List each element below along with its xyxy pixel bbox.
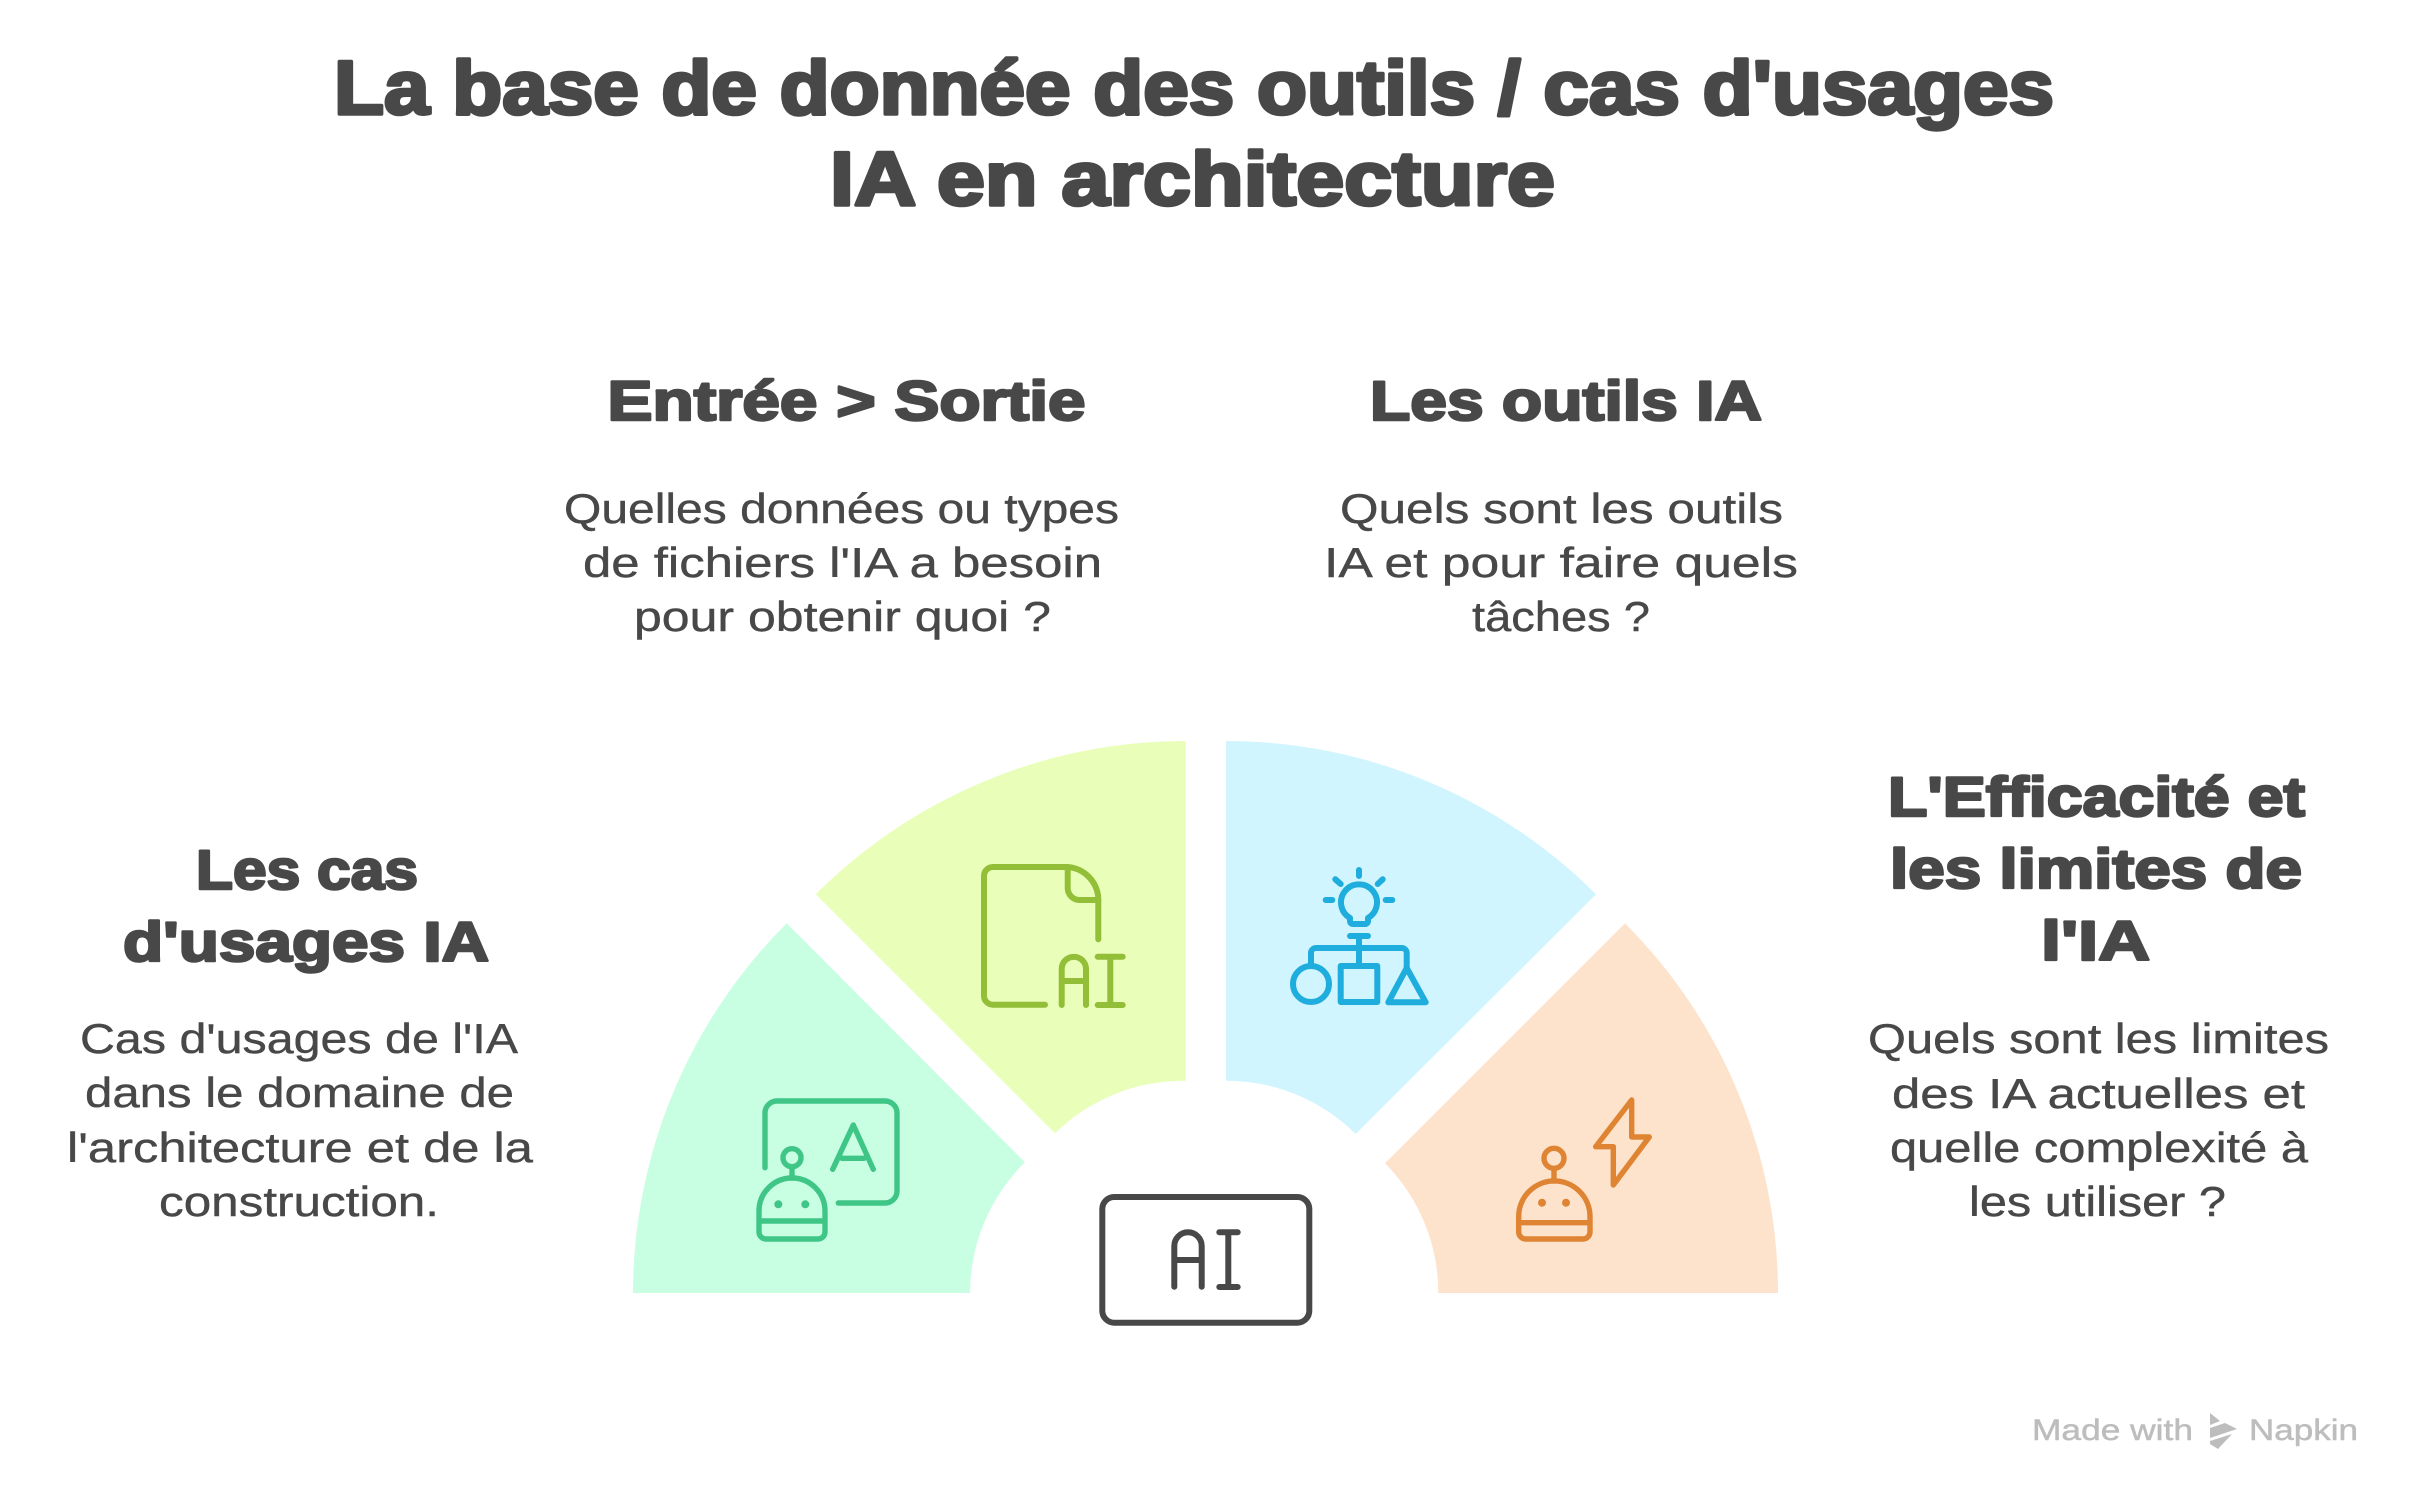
icon: robot with letter board: [759, 1101, 897, 1239]
heading: les cas d'usages IA: [123, 838, 489, 973]
text block: entrée sortie description: [564, 485, 1119, 640]
text block: efficacité description: des IA actuelles et: [1892, 1070, 2305, 1117]
text block: cas d'usages description: l'architecture et de la: [67, 1124, 534, 1171]
heading: efficacité et limites: L'Efficacité et: [1888, 765, 2305, 828]
text block: entrée sortie description: pour obtenir quoi ?: [634, 593, 1051, 640]
heading: entrée sortie: Entrée > Sortie: [608, 369, 1086, 432]
icon: robot with lightning bolt: [1519, 1100, 1649, 1239]
heading: les outils IA: Les outils IA: [1370, 369, 1762, 432]
title: IA en architecture: [830, 137, 1555, 222]
text block: entrée sortie description: de fichiers l'IA a besoin: [583, 539, 1102, 586]
watermark: made with napkin: Made with: [2032, 1414, 2193, 1447]
text block: les outils description: tâches ?: [1472, 593, 1650, 640]
text block: efficacité description: quelle complexité à: [1890, 1124, 2309, 1171]
title: [334, 46, 2054, 222]
watermark: made with napkin: [2032, 1413, 2358, 1449]
icon: AI document: [984, 867, 1123, 1005]
watermark: made with napkin: Napkin: [2249, 1414, 2358, 1447]
text block: les outils description: [1324, 485, 1798, 640]
heading: les cas d'usages IA: d'usages IA: [123, 910, 489, 973]
text block: cas d'usages description: dans le domaine de: [85, 1069, 514, 1116]
text block: les outils description: IA et pour faire quels: [1324, 539, 1798, 586]
center box: AI: [1102, 1197, 1309, 1323]
text block: efficacité description: Quels sont les limites: [1868, 1015, 2329, 1062]
panel: efficacité et limites text: [1868, 765, 2329, 1225]
heading: efficacité et limites: [1888, 765, 2305, 972]
text block: efficacité description: [1868, 1015, 2329, 1225]
text block: cas d'usages description: construction.: [159, 1178, 439, 1225]
heading: efficacité et limites: l'IA: [2041, 909, 2150, 972]
heading: les cas d'usages IA: Les cas: [196, 838, 418, 901]
text block: entrée sortie description: Quelles données ou types: [564, 485, 1119, 532]
wedge: yellow input output: [816, 741, 1186, 1133]
wedge: orange limits: [1385, 923, 1778, 1293]
text block: efficacité description: les utiliser ?: [1969, 1178, 2226, 1225]
text block: cas d'usages description: Cas d'usages de l'IA: [80, 1015, 518, 1062]
text block: les outils description: Quels sont les outils: [1340, 485, 1783, 532]
text block: cas d'usages description: [67, 1015, 534, 1225]
wedge: green use cases: [633, 923, 1025, 1293]
icon: napkin logo: [2210, 1413, 2237, 1449]
panel: les cas d'usages IA text: [67, 838, 534, 1225]
panel: entrée sortie text: [564, 369, 1119, 640]
icon: light bulb with shapes: [1293, 870, 1426, 1002]
title: La base de donnée des outils / cas d'usages: [334, 46, 2054, 131]
heading: efficacité et limites: les limites de: [1890, 837, 2302, 900]
panel: les outils IA text: [1324, 369, 1798, 640]
wedge: blue tools: [1226, 741, 1596, 1134]
